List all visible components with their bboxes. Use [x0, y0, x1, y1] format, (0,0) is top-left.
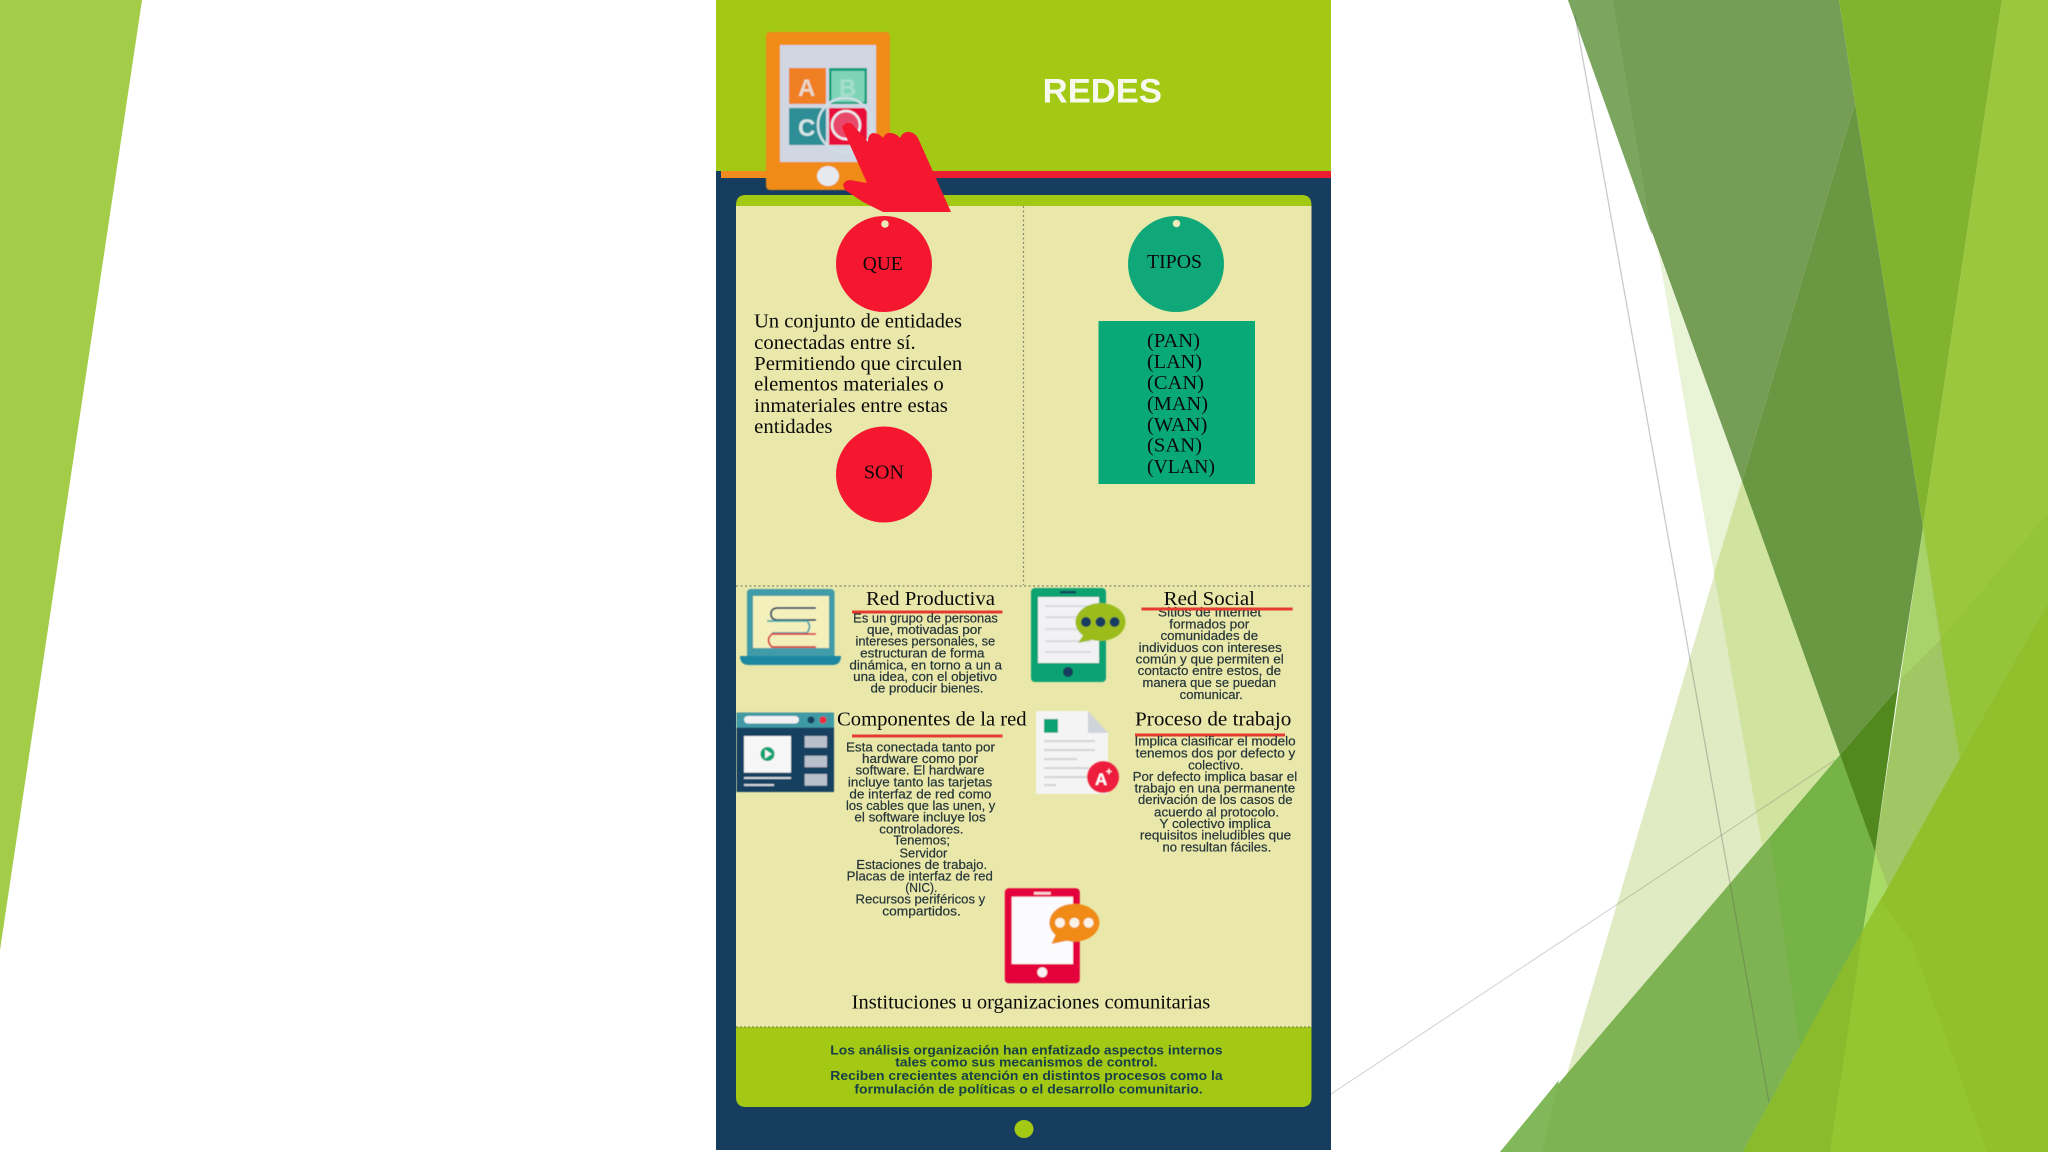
list box: network types: (SAN)	[1147, 435, 1202, 457]
text block: Red Productiva: intereses personales, se	[856, 635, 995, 649]
footer text	[830, 1042, 1223, 1096]
text block: Componentes de la red: Esta conectada tanto por	[846, 740, 995, 754]
text block: Red Productiva: Es un grupo de personas	[853, 612, 998, 626]
text block: Componentes de la red: Servidor	[900, 846, 947, 860]
text block: Componentes de la red: controladores.	[879, 822, 964, 836]
badge: TIPOS	[1128, 216, 1224, 312]
text block: Red Social	[1136, 606, 1284, 702]
text block: Componentes de la red: de interfaz de red como	[849, 787, 991, 801]
icon: browser window	[736, 713, 834, 792]
text block: Componentes de la red: los cables que las unen, y	[846, 799, 996, 813]
footer text: formulación de políticas o el desarrollo comunitario.	[854, 1081, 1203, 1096]
text block: Red Productiva: de producir bienes.	[870, 682, 983, 696]
icon: pointing hand	[842, 123, 951, 212]
text block: definition: inmateriales entre estas	[754, 395, 948, 417]
icon: document with A+ badge: +	[1106, 767, 1112, 778]
text block: Proceso de trabajo: Y colectivo implica	[1159, 817, 1271, 831]
icon: tablet with alphabet tiles: B	[839, 75, 856, 102]
icon: red phone with orange chat bubble	[1005, 888, 1099, 983]
list box: network types: (MAN)	[1147, 393, 1208, 415]
footer text: Reciben crecientes atención en distintos procesos como la	[830, 1068, 1223, 1083]
text block: definition: Un conjunto de entidades	[754, 310, 962, 332]
text block: Componentes de la red: Estaciones de trabajo.	[856, 858, 987, 872]
text block: Red Social: Sitios de Internet	[1158, 606, 1262, 620]
title: REDES	[1043, 72, 1162, 110]
heading: Instituciones u organizaciones comunitarias: Instituciones u organizaciones comunitarias	[852, 991, 1211, 1013]
text block: Componentes de la red: hardware como por	[862, 752, 978, 766]
badge: SON	[836, 426, 932, 522]
heading: Proceso de trabajo: Proceso de trabajo	[1135, 709, 1291, 731]
text block: Proceso de trabajo: no resultan fáciles.	[1162, 840, 1271, 854]
badge: QUE	[836, 216, 932, 312]
text block: Red Productiva: una idea, con el objetivo	[853, 670, 997, 684]
list box: network types: (WAN)	[1147, 414, 1207, 436]
list box: network types	[1098, 321, 1255, 484]
icon: tablet with alphabet tiles	[766, 32, 890, 190]
text block: definition	[754, 310, 962, 438]
list box: network types: (VLAN)	[1147, 456, 1215, 478]
list box: network types: (LAN)	[1147, 351, 1202, 373]
text block: definition: conectadas entre sí.	[754, 332, 916, 354]
text block: Proceso de trabajo: Por defecto implica basar el	[1133, 770, 1297, 784]
text block: Red Social: común y que permiten el	[1136, 653, 1284, 667]
text block: Componentes de la red: software. El hardware	[856, 764, 985, 778]
left background facet	[0, 0, 142, 950]
icon: tablet with alphabet tiles: C	[798, 115, 815, 142]
text block: definition: Permitiendo que circulen	[754, 353, 962, 375]
main panel	[736, 195, 1312, 1107]
text block: Componentes de la red: incluye tanto las tarjetas	[848, 775, 992, 789]
text block: Proceso de trabajo: acuerdo al protocolo.	[1154, 805, 1279, 819]
heading: Red Social: Red Social	[1164, 588, 1255, 610]
icon: document with A+ badge	[1036, 711, 1119, 794]
text block: Red Social: contacto entre estos, de	[1138, 664, 1281, 678]
list box: network types: (PAN)	[1147, 330, 1200, 352]
heading: Componentes de la red: Componentes de la red	[837, 709, 1027, 731]
text block: Componentes de la red: Placas de interfaz de red	[847, 869, 993, 883]
icon: laptop with books	[740, 589, 841, 665]
text block: Proceso de trabajo: tenemos dos por defecto y	[1136, 747, 1296, 761]
footer text: tales como sus mecanismos de control.	[895, 1055, 1158, 1070]
home button dot	[1014, 1120, 1034, 1138]
text block: Red Productiva: estructuran de forma	[860, 646, 985, 660]
text block: definition: elementos materiales o	[754, 374, 944, 396]
text block: Componentes de la red	[846, 740, 996, 919]
text block: Componentes de la red: (NIC).	[905, 881, 937, 895]
text block: Proceso de trabajo: Implica clasificar el modelo	[1134, 734, 1296, 748]
badge: QUE: QUE	[863, 253, 903, 275]
text block: Proceso de trabajo: requisitos ineludibles que	[1140, 829, 1291, 843]
text block: Componentes de la red: Tenemos;	[893, 833, 950, 847]
right background facets	[1331, 0, 2048, 1152]
badge: SON: SON	[864, 461, 904, 483]
icon: tablet with alphabet tiles: A	[798, 75, 815, 102]
list box: network types: (CAN)	[1147, 372, 1204, 394]
text block: Red Productiva	[849, 612, 1002, 696]
text block: Componentes de la red: el software incluye los	[854, 811, 986, 825]
text block: Red Social: individuos con intereses	[1139, 641, 1282, 655]
text block: Componentes de la red: compartidos.	[882, 905, 961, 919]
text block: Red Social: comunidades de	[1160, 629, 1258, 643]
text block: Red Social: formados por	[1169, 618, 1249, 632]
icon: document with A+ badge: A	[1095, 770, 1107, 789]
text block: Red Productiva: que, motivadas por	[867, 623, 982, 637]
header band	[716, 0, 1331, 178]
text block: definition: entidades	[754, 416, 833, 438]
heading: Red Productiva: Red Productiva	[866, 588, 995, 610]
text block: Red Social: manera que se puedan	[1142, 676, 1276, 690]
text block: Proceso de trabajo: trabajo en una permanente	[1134, 781, 1295, 795]
badge: TIPOS: TIPOS	[1147, 251, 1202, 273]
text block: Proceso de trabajo	[1133, 734, 1297, 854]
text block: Componentes de la red: Recursos periféricos y	[856, 892, 986, 906]
footer text: Los análisis organización han enfatizado aspectos internos	[830, 1042, 1223, 1057]
infographic poster	[716, 0, 1331, 1150]
icon: green tablet with chat bubble	[1031, 588, 1126, 682]
text block: Red Productiva: dinámica, en torno a un a	[849, 658, 1002, 672]
text block: Proceso de trabajo: derivación de los casos de	[1138, 793, 1293, 807]
text block: Red Social: comunicar.	[1180, 688, 1243, 702]
heading: Red Social	[1141, 588, 1293, 610]
text block: Proceso de trabajo: colectivo.	[1188, 758, 1244, 772]
